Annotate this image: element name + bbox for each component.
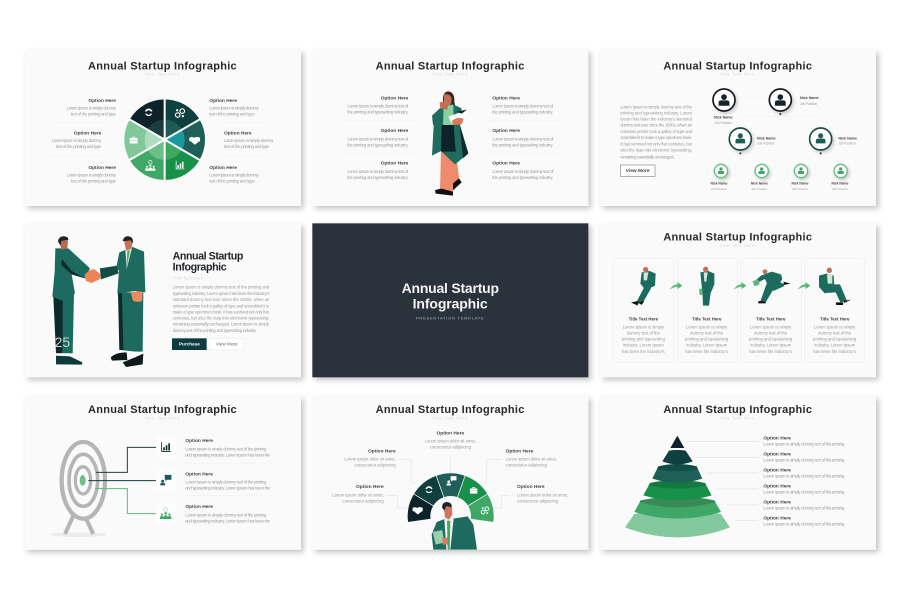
- heading: [173, 250, 244, 273]
- figure 4: [819, 268, 851, 305]
- option 6: Option Here: [763, 515, 791, 521]
- option right 1: Lorem ipsum is simply dummy text of: [492, 104, 554, 109]
- option right 2: text of the printing and type: [224, 144, 270, 149]
- option lower left: Option Here: [356, 484, 384, 490]
- heading: Infographic: [173, 261, 227, 273]
- heading: Annual Startup: [173, 250, 244, 262]
- button: view more: [620, 165, 655, 176]
- org circles: [713, 89, 847, 178]
- paragraph: unknown printer took a galley of type and scrambled it to: [173, 303, 270, 308]
- name labels: Job Position: [711, 187, 727, 191]
- panel: pyramid: [600, 396, 876, 550]
- option right 3: the printing and typesetting industry.: [492, 175, 554, 180]
- subtitle: Your Text Here: [145, 415, 180, 420]
- card text 3: industry. Lorem Ipsum: [750, 343, 792, 348]
- option upper right: Lorem ipsum dolor sit amet,: [506, 457, 557, 462]
- name labels: Nick Name: [714, 115, 733, 119]
- option upper left: [344, 448, 396, 468]
- option top: [425, 430, 476, 450]
- option lower right: Lorem ipsum dolor sit amet,: [517, 492, 568, 497]
- card text 3: dummy text of the: [754, 330, 788, 335]
- arrows: [669, 282, 810, 290]
- option left 1: [347, 96, 409, 115]
- option right 1: text of the printing and type: [209, 111, 255, 116]
- option left 3: [67, 165, 117, 183]
- option top: consectetur adipiscing: [430, 445, 472, 450]
- title: Annual Startup Infographic: [376, 60, 524, 72]
- option left 1: Option Here: [88, 98, 116, 104]
- card text 1: has been the industry's: [622, 349, 665, 354]
- option right 2: Lorem ipsum is simply dummy text of: [492, 136, 554, 141]
- option right 2: Lorem ipsum is simply dummy: [224, 138, 274, 143]
- option left 2: [52, 131, 102, 149]
- icon box: bars: [156, 436, 176, 457]
- card text 4: printing and typesetting: [813, 337, 857, 342]
- card text 2: dummy text of the: [690, 330, 724, 335]
- option 6: [763, 515, 845, 527]
- option lower left: consectetur adipiscing: [343, 498, 384, 503]
- name labels: Job Position: [751, 187, 768, 191]
- option right 1: Option Here: [209, 98, 237, 104]
- subtitle: Your Text Here: [720, 243, 755, 248]
- semicircle chart: [407, 473, 494, 522]
- card text 3: [749, 316, 793, 354]
- name labels: Nick Name: [791, 182, 809, 186]
- option right 3: Lorem ipsum is simply dummy: [209, 172, 260, 177]
- illustration: woman: [432, 91, 468, 196]
- cards: [613, 258, 864, 363]
- button: purchase: Purchase: [179, 342, 200, 347]
- card text 2: has been the industry's: [685, 349, 728, 354]
- option left 2: text of the printing and type: [56, 144, 102, 149]
- option lower left: Lorem ipsum dolor sit amet,: [332, 492, 384, 497]
- paragraph: dummy text of the printing and typesetting industry.: [173, 328, 257, 333]
- cover title: Infographic: [413, 295, 488, 311]
- option right 1: Option Here: [492, 96, 520, 102]
- title: Annual Startup Infographic: [88, 404, 237, 416]
- figure 1: [631, 267, 656, 306]
- card text 1: Lorem Ipsum is simply: [623, 324, 665, 329]
- card text 3: Lorem Ipsum is simply: [750, 324, 792, 329]
- name labels: Nick Name: [800, 96, 819, 100]
- paragraph: typesetting industry. Lorem Ipsum has been the industry's: [173, 291, 269, 296]
- pie chart: [124, 98, 205, 181]
- option right 1: Lorem ipsum is simply dummy: [209, 105, 260, 110]
- card text 4: Lorem Ipsum is simply: [814, 324, 856, 329]
- subtitle: Your Text Here: [720, 72, 755, 77]
- option right 2: the printing and typesetting industry.: [492, 142, 554, 147]
- subtitle: Your Text Here: [173, 275, 204, 280]
- name labels: [710, 96, 857, 191]
- name labels: Nick Name: [751, 182, 768, 186]
- paragraph: remaining essentially unchanged.: [620, 155, 674, 160]
- card text 3: printing and typesetting: [749, 337, 793, 342]
- paragraph: standard dummy text ever since the 1500s, when an: [173, 297, 270, 302]
- option right 2: Option Here: [224, 131, 252, 137]
- option right 3: Lorem ipsum is simply dummy text of: [492, 169, 554, 174]
- option 1: Lorem ipsum is simply dummy text of the printing: [763, 442, 845, 447]
- option 5: Option Here: [763, 499, 791, 505]
- card text 1: industry. Lorem Ipsum: [623, 343, 664, 348]
- option 4: Option Here: [763, 483, 791, 489]
- option right 3: Option Here: [209, 165, 237, 171]
- name labels: Nick Name: [757, 137, 776, 141]
- panel: four steps: [600, 223, 876, 377]
- card text 1: Title Text Here: [629, 316, 659, 321]
- pyramid: [625, 436, 730, 537]
- option left 1: the printing and typesetting industry.: [347, 110, 409, 115]
- paragraph: also the leap into electronic typesetting,: [620, 147, 692, 152]
- paragraph: Lorem Ipsum is simply dummy text of the: [620, 104, 693, 109]
- option left 2: Option Here: [381, 128, 409, 134]
- name labels: Job Position: [832, 187, 848, 191]
- option left 3: the printing and typesetting industry.: [347, 175, 409, 180]
- option 2: [185, 471, 271, 490]
- option right 2: [492, 128, 554, 147]
- option 1: Lorem ipsum is simply dummy text of the printing: [185, 447, 267, 452]
- option left 1: [67, 98, 117, 116]
- card text 1: [622, 316, 666, 354]
- option right 1: the printing and typesetting industry.: [492, 110, 554, 115]
- name labels: Nick Name: [710, 182, 728, 186]
- option 3: and typesetting industry. Lorem ipsum has been the: [185, 518, 271, 523]
- illustration: right man: [100, 236, 145, 367]
- title: Annual Startup Infographic: [88, 60, 237, 72]
- option 1: Option Here: [185, 438, 213, 444]
- name labels: Job Position: [715, 121, 732, 125]
- paragraph: remaining essentially unchanged. Lorem Ipsum is simply: [173, 322, 270, 327]
- paragraph: dummy text ever since the 1500s, when an: [620, 123, 693, 128]
- cover title: [402, 280, 499, 311]
- option left 2: Lorem ipsum is simply dummy text of: [347, 136, 409, 141]
- name labels: Job Position: [800, 102, 817, 106]
- card text 4: has been the industry's: [813, 349, 856, 354]
- name labels: Nick Name: [838, 137, 857, 141]
- figure 3: [753, 269, 790, 303]
- option left 1: Option Here: [381, 96, 409, 102]
- card text 4: industry. Lorem Ipsum: [814, 343, 856, 348]
- option left 2: Lorem ipsum is simply dummy: [52, 138, 102, 143]
- option left 2: the printing and typesetting industry.: [347, 142, 409, 147]
- option upper right: [506, 448, 557, 468]
- card text 4: dummy text of the: [818, 330, 852, 335]
- option left 1: Lorem ipsum is simply dummy text of: [347, 104, 409, 109]
- option 2: and typesetting industry. Lorem ipsum has been the: [185, 485, 271, 490]
- figure 2: [699, 267, 714, 306]
- option left 3: Lorem ipsum is simply dummy text of: [347, 169, 409, 174]
- panel: dark cover: [312, 223, 588, 377]
- paragraph: Ipsum has been the industry's standard: [620, 117, 693, 122]
- button: view more: View More: [216, 342, 238, 347]
- paragraph: [173, 285, 270, 333]
- button: purchase: [172, 338, 207, 350]
- option right 3: [209, 165, 260, 183]
- option upper left: Lorem ipsum dolor sit amet,: [344, 457, 396, 462]
- option 3: [185, 504, 271, 523]
- option upper left: Option Here: [368, 448, 396, 454]
- option lower right: Option Here: [517, 484, 545, 490]
- option lower right: consectetur adipiscing: [517, 498, 559, 503]
- card text 3: Title Text Here: [756, 316, 786, 321]
- option 6: Lorem ipsum is simply dummy text of the printing: [763, 522, 845, 527]
- option 5: Lorem ipsum is simply dummy text of the printing: [763, 506, 845, 511]
- name labels: Job Position: [757, 142, 774, 146]
- option left 3: Lorem ipsum is simply dummy: [67, 172, 117, 177]
- connectors: [387, 456, 509, 508]
- option 3: [763, 467, 845, 479]
- number overlay: 25: [55, 334, 70, 350]
- panel: semicircle man: [312, 396, 588, 550]
- button: view more: [209, 338, 244, 350]
- button: view more: View More: [626, 168, 650, 174]
- title: Annual Startup Infographic: [663, 232, 812, 244]
- option upper right: Option Here: [506, 448, 534, 454]
- subtitle: Your Text Here: [432, 72, 468, 77]
- card text 4: [813, 316, 857, 354]
- icon box: team: [156, 503, 176, 524]
- illustration: left man: [52, 236, 90, 365]
- name labels: Job Position: [838, 142, 856, 146]
- option right 3: Option Here: [492, 161, 520, 167]
- option 3: Option Here: [185, 504, 213, 510]
- name labels: Job Position: [792, 187, 808, 191]
- panel: handshake: [25, 223, 301, 377]
- option left 3: Option Here: [88, 165, 116, 171]
- option right 1: [492, 96, 554, 115]
- option left 1: text of the printing and type: [71, 111, 117, 116]
- option right 2: [224, 131, 274, 149]
- option left 2: Option Here: [74, 131, 102, 137]
- option 4: [763, 483, 845, 495]
- option upper right: consectetur adipiscing: [506, 463, 547, 468]
- card text 2: Lorem Ipsum is simply: [686, 324, 728, 329]
- subtitle: Your Text Here: [432, 415, 468, 420]
- paragraph: It has survived not only five centuries, but: [620, 141, 693, 146]
- paragraph: [620, 104, 693, 160]
- card text 2: industry. Lorem Ipsum: [686, 343, 728, 348]
- option right 1: [209, 98, 260, 116]
- option upper left: consectetur adipiscing: [355, 463, 396, 468]
- subtitle: Your Text Here: [145, 72, 180, 77]
- card text 2: Title Text Here: [692, 316, 722, 321]
- option 1: Option Here: [763, 435, 791, 441]
- option lower left: [332, 484, 384, 503]
- cover subtitle: PRESENTATION TEMPLATE: [416, 316, 484, 321]
- paragraph: unknown printer took a galley of type and: [620, 129, 693, 134]
- option 2: Lorem ipsum is simply dummy text of the printing: [763, 458, 845, 463]
- connector lines: [88, 447, 157, 514]
- paragraph: Lorem Ipsum is simply dummy text of the printing and: [173, 285, 270, 290]
- card text 2: [685, 316, 729, 354]
- paragraph: printing and typesetting industry. Lorem: [620, 110, 693, 115]
- option right 3: text of the printing and type: [209, 178, 255, 183]
- cover title: Annual Startup: [402, 280, 499, 296]
- paragraph: centuries, but also the leap into electronic typesetting,: [173, 316, 269, 321]
- option right 3: [492, 161, 554, 180]
- option 3: Option Here: [763, 467, 791, 473]
- option left 3: [347, 161, 409, 180]
- option 1: and typesetting industry. Lorem ipsum has been the: [185, 452, 271, 457]
- option 2: Option Here: [185, 471, 213, 477]
- option right 2: Option Here: [492, 128, 520, 134]
- target illustration: [50, 442, 107, 537]
- option 2: Option Here: [763, 451, 791, 457]
- option 2: Lorem ipsum is simply dummy text of the printing: [185, 479, 267, 484]
- title: Annual Startup Infographic: [663, 404, 812, 416]
- option 4: Lorem ipsum is simply dummy text of the printing: [763, 490, 845, 495]
- option left 2: [347, 128, 409, 147]
- leader lines: [687, 441, 758, 521]
- option top: Option Here: [437, 430, 464, 436]
- option left 3: text of the printing and type: [71, 178, 117, 183]
- option 3: Lorem ipsum is simply dummy text of the printing: [763, 474, 845, 479]
- option top: Lorem ipsum dolor sit amet,: [425, 439, 476, 444]
- card text 4: Title Text Here: [820, 316, 850, 321]
- paragraph: make a type specimen book. It has survived not only five: [173, 309, 270, 314]
- card text 1: printing and typesetting: [622, 337, 666, 342]
- panel: target: [25, 396, 301, 550]
- card text 2: printing and typesetting: [685, 337, 729, 342]
- option left 1: Lorem ipsum is simply dummy: [67, 105, 117, 110]
- panel: pie infographic: [25, 50, 301, 206]
- panel: team hierarchy: [600, 50, 876, 206]
- option 1: [185, 438, 271, 457]
- option left 3: Option Here: [381, 161, 409, 167]
- card text 3: has been the industry's: [749, 349, 792, 354]
- paragraph: scrambled it to make a type specimen book.: [620, 135, 692, 140]
- title: Annual Startup Infographic: [376, 404, 524, 416]
- subtitle: Your Text Here: [720, 415, 755, 420]
- option 5: [763, 499, 845, 511]
- title: Annual Startup Infographic: [663, 60, 812, 72]
- option 2: [763, 451, 845, 463]
- card text 1: dummy text of the: [627, 330, 661, 335]
- name labels: Nick Name: [831, 182, 849, 186]
- panel: woman with options: [312, 50, 588, 206]
- option lower right: [517, 484, 568, 503]
- option 3: Lorem ipsum is simply dummy text of the printing: [185, 512, 267, 517]
- icon box: flag: [156, 470, 176, 491]
- illustration: handshake hands: [85, 269, 101, 283]
- option 1: [763, 435, 845, 447]
- illustration: man: [432, 502, 477, 550]
